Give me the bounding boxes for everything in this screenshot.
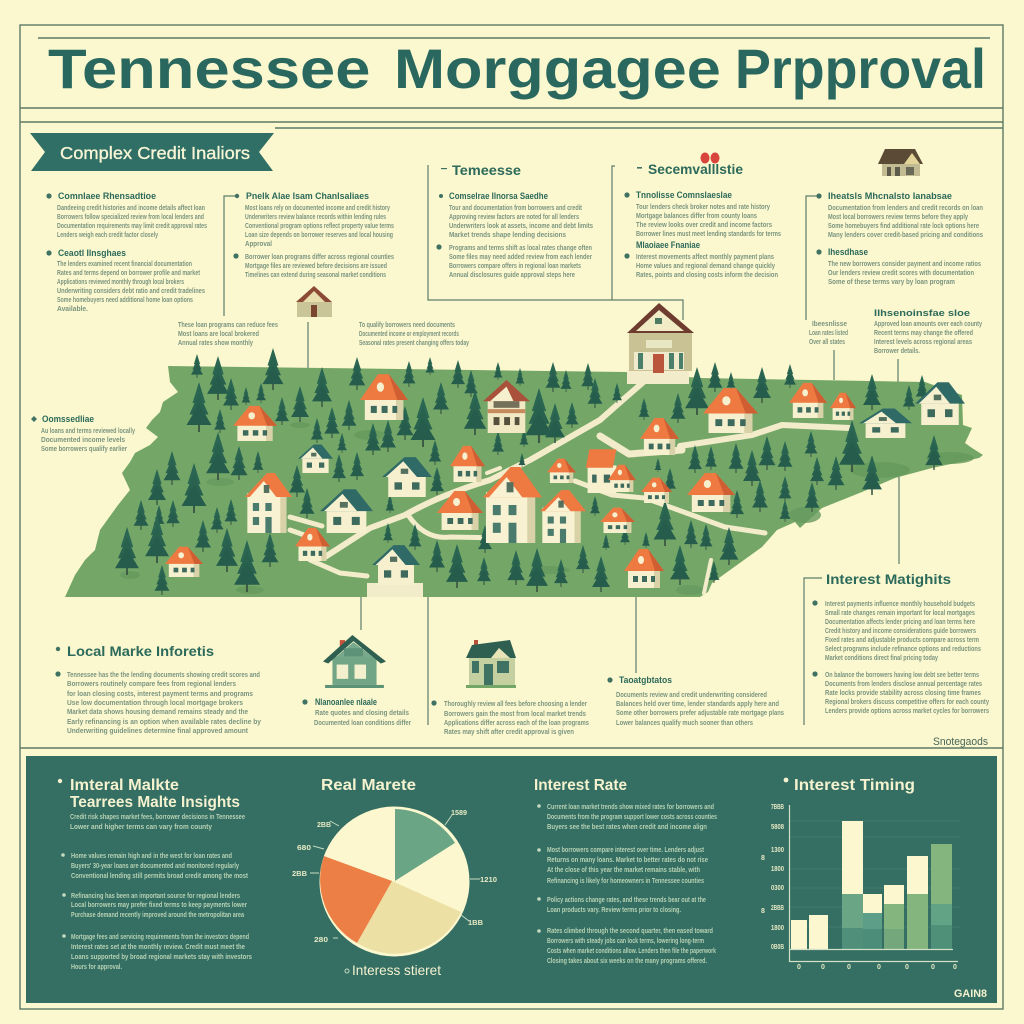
icon: red blobs: [700, 152, 720, 164]
main house: [627, 303, 694, 384]
text block: Market column: Most local borrowers review terms before they apply: [828, 212, 968, 221]
text block: Interest Rate: Documents from the program support lower costs across counties: [547, 812, 717, 821]
text block: Secondary column: [624, 152, 781, 279]
pie chart: [292, 806, 497, 956]
text block: Market column: Documentation from lenders and credit records on loan: [828, 203, 983, 212]
text block: Secondary column: The review looks over credit and income factors: [636, 220, 772, 229]
text block: Local Market Insights: Local Marke Inforetis: [67, 643, 214, 659]
text block: Secondary column: Mlaoiaee Fnaniae: [636, 240, 700, 250]
bar chart: 1800: [771, 866, 784, 873]
text block: Internal Market Insights: Purchase demand recently improved around the metropolitan area: [71, 910, 245, 919]
text block: Secondary column: Mortgage balances differ from county loans: [636, 211, 757, 220]
text block: Lending notes: Borrowers gain the most from local market trends: [444, 709, 586, 718]
panel: connector lines: [224, 165, 899, 725]
bar chart: 8: [761, 908, 765, 915]
text block: Financial Details: Nlanoanlee nlaale: [315, 697, 377, 707]
text block: Complex Financing column: Some homebuyers need additional home loan options: [57, 295, 193, 304]
text block: Local Market Insights: [55, 643, 261, 735]
text block: Interest Insights: Interest Matighits: [826, 571, 951, 587]
text block: Interest Insights: Interest payments influence monthly household budgets: [825, 599, 975, 608]
text block: Oomssedliae: Oomssedliae: [42, 414, 94, 424]
text block: Tennessee column: [436, 162, 593, 279]
text block: Profile column: [233, 191, 394, 279]
text block: Complex Financing column: Underwriting considers debt ratio and credit tradelines: [57, 286, 205, 295]
bar chart: 8: [761, 855, 765, 862]
text block: Complex Financing column: Rates and terms depend on borrower profile and market: [57, 268, 200, 277]
text block: mid callouts above map: Ilhsenoinsfae sloe: [874, 308, 970, 318]
text block: mid callouts above map: Approved loan amounts over each county: [874, 319, 982, 328]
text block: Tennessee column: Comselrae Ilnorsa Saedhe: [449, 191, 548, 201]
bar chart: 7BBB: [771, 804, 784, 811]
text block: mid callouts above map: Interest levels across regional areas: [874, 337, 972, 346]
text block: Complex Financing column: [46, 191, 207, 313]
text block: Interest Rate: Borrowers with steady jobs can lock terms, lowering long-term: [547, 936, 704, 945]
text block: Secondary column: Tour lenders check broker notes and rate history: [636, 202, 770, 211]
text block: Timing: [607, 675, 784, 727]
bar chart: 0300: [771, 885, 784, 892]
text block: Secondary column: Home values and regional demand change quickly: [636, 261, 775, 270]
tree group: [115, 348, 943, 595]
text block: Lending notes: Thoroughly review all fees before choosing a lender: [444, 699, 587, 708]
footnote: Snotegaods: Snotegaods: [933, 736, 988, 748]
icon: green house right: [466, 640, 516, 688]
text block: Secondary column: Borrower lines must meet lending standards for terms: [636, 229, 781, 238]
text block: Internal Market Insights: Home values remain high and in the west for loan rates and: [71, 851, 232, 860]
text block: Secondary column: Tnnolisse Comnslaeslae: [636, 190, 732, 200]
text block: Timing: Some other borrowers prefer adjustable rate mortgage plans: [616, 708, 784, 717]
text block: Secondary column: Interest movements affect monthly payment plans: [636, 252, 774, 261]
text block: Local Market Insights: Market data shows housing demand remains steady and the: [67, 707, 248, 716]
text block: Internal Market Insights: [58, 777, 252, 971]
text block: Market column: Some homebuyers find additional rate lock options here: [828, 221, 979, 230]
text block: Tennessee column: Temeesse: [452, 162, 521, 178]
text block: Timing: Lower balances qualify much sooner than others: [616, 718, 753, 727]
bar chart: 0: [905, 964, 909, 971]
text block: mid callouts above map: Loan rates listed: [809, 328, 848, 337]
state shape: [65, 366, 983, 597]
text block: Complex Financing column: Ceaotl Ilnsghaes: [58, 248, 126, 258]
text block: Interest Insights: Credit history and income considerations guide borrowers: [825, 626, 976, 635]
icon: top right house: [878, 149, 923, 176]
text block: mid callouts above map: Borrower details.: [874, 346, 920, 355]
bar chart: 0: [931, 964, 935, 971]
text block: Profile column: Timelines can extend during seasonal market conditions: [245, 270, 386, 279]
bar chart: 0: [877, 964, 881, 971]
text block: Interest Rate: Rates climbed through the second quarter, then eased toward: [547, 926, 713, 935]
text block: mid callouts above map: Seasonal rates present changing offers today: [359, 338, 469, 347]
heading: Real Marete: Real Marete: [321, 777, 416, 794]
text block: Complex Financing column: Documentation requirements may limit credit approval rates: [57, 221, 207, 230]
text block: Tennessee column: Tour and documentation from borrowers and credit: [449, 203, 582, 212]
text block: mid callouts above map: Over all states: [809, 337, 845, 346]
panel: teal insights: [26, 756, 997, 1003]
pie caption: Interess stieret: [352, 962, 441, 978]
text block: Tennessee column: Underwriters look at assets, income and debt limits: [449, 221, 593, 230]
text block: Market column: The new borrowers consider payment and income ratios: [828, 259, 981, 268]
text block: Secondary column: Secemvalllstie: [648, 161, 743, 177]
text block: Interest Insights: Select programs include refinance options and reductions: [825, 644, 981, 653]
text block: Internal Market Insights: Buyers' 30-year loans are documented and monitored regularly: [71, 861, 240, 870]
text block: Internal Market Insights: Interest rates set at the monthly review. Credit must meet the: [71, 942, 245, 951]
bar chart: 5808: [771, 824, 784, 831]
text block: Tennessee column: Annual disclosures guide approval steps here: [449, 270, 575, 279]
map: Tennessee landscape: [65, 303, 983, 597]
text block: Complex Financing column: Borrowers follow specialized review from local lenders and: [57, 212, 204, 221]
banner: Complex Credit Inaliors: [30, 133, 274, 171]
text block: Complex Financing column: Comnlaee Rhensadtioe: [58, 191, 156, 201]
text block: Timing: Taoatgbtatos: [619, 675, 672, 685]
pie chart: 1BB: [468, 918, 484, 927]
bar chart: 0: [797, 964, 801, 971]
text block: Interest Insights: Small rate changes remain important for local mortgages: [825, 608, 975, 617]
text block: Internal Market Insights: Hours for approval.: [71, 962, 122, 971]
text block: Internal Market Insights: Lower and higher terms can vary from county: [70, 822, 213, 831]
text block: Lending notes: Rates may shift after credit approval is given: [444, 727, 574, 736]
heading: Interest Timing: Interest Timing: [794, 777, 915, 794]
text block: Internal Market Insights: Credit risk shapes market fees, borrower decisions in Tennessee: [70, 812, 245, 821]
text block: Market column: Many lenders cover credit-based pricing and conditions: [828, 230, 983, 239]
text block: Profile column: Mortgage files are reviewed before decisions are issued: [245, 261, 387, 270]
pie chart: 1589: [451, 808, 467, 817]
text block: Interest Rate: Interest Rate: [534, 777, 627, 794]
text block: Profile column: Approval: [245, 239, 272, 248]
text block: Interest Rate: Buyers see the best rates when credit and income align: [547, 822, 707, 831]
text block: Complex Financing column: Lenders weigh each credit factor closely: [57, 230, 158, 239]
text block: Oomssedliae: [31, 414, 135, 453]
text block: Timing: Balances held over time, lender standards apply here and: [616, 699, 779, 708]
text block: Internal Market Insights: Mortgage fees and servicing requirements from the investors depend: [71, 932, 249, 941]
text block: Lending notes: Applications differ across each of the loan programs: [444, 718, 589, 727]
pie chart: 1210: [480, 875, 497, 884]
text block: Interest Rate: Costs when market conditions allow. Lenders then file the paperwork: [547, 946, 717, 955]
bar chart: 0: [847, 964, 851, 971]
bar chart: 1800: [771, 925, 784, 932]
text block: Interest Rate: [534, 777, 717, 965]
roads: [290, 378, 850, 593]
text block: Tennessee column: Borrowers compare offers in regional loan markets: [449, 261, 581, 270]
text block: Internal Market Insights: Local borrowers may prefer fixed terms to keep payments lower: [71, 900, 247, 909]
text block: mid callouts above map: Ibeesnlisse: [812, 319, 847, 328]
text block: Tennessee column: Some files may need added review from each lender: [449, 252, 592, 261]
text block: Financial Details: Rate quotes and closing details: [315, 708, 409, 717]
text block: Interest Rate: Policy actions change rates, and these trends bear out at the: [547, 895, 706, 904]
text block: mid callouts above map: [178, 308, 982, 355]
pie chart: 2BB: [317, 820, 332, 829]
text block: mid callouts above map: These loan programs can reduce fees: [178, 320, 278, 329]
bar chart: 0: [953, 964, 957, 971]
text block: Local Market Insights: Borrowers routinely compare fees from regional lenders: [67, 679, 236, 688]
text block: Internal Market Insights: Conventional lending still permits broad credit among the most: [71, 871, 248, 880]
text block: Oomssedliae: Some borrowers qualify earlier: [41, 444, 127, 453]
bar chart: 0: [821, 964, 825, 971]
text block: Interest Insights: On balance the borrowers having low debt see better terms: [825, 670, 979, 679]
text block: Market column: [816, 191, 983, 286]
text block: Financial Details: [302, 697, 411, 727]
text block: Profile column: Pnelk Alae Isam Chanlsaliaes: [246, 191, 369, 201]
text block: Profile column: Most loans rely on documented income and credit history: [245, 203, 390, 212]
text block: Interest Rate: At the close of this year the market remains stable, with: [547, 865, 700, 874]
text block: mid callouts above map: Annual rates show monthly: [178, 338, 253, 347]
text block: Local Market Insights: Early refinancing is an option when available rates decline by: [67, 717, 261, 726]
text block: Tennessee column: Approving review factors are noted for all lenders: [449, 212, 579, 221]
bar chart: 1300: [771, 847, 784, 854]
text block: Market column: Our lenders review credit scores with documentation: [828, 268, 974, 277]
text block: Profile column: Conventional program options reflect property value terms: [245, 221, 394, 230]
text block: Interest Insights: Documents from lenders disclose annual percentage rates: [825, 679, 982, 688]
text block: Lending notes: [431, 699, 589, 736]
text block: Tennessee column: Market trends shape lending decisions: [449, 230, 566, 239]
text block: Local Market Insights: Use low documentation through local mortgage brokers: [67, 698, 243, 707]
text block: Local Market Insights: Tennessee has the the lending documents showing credit scores and: [67, 670, 260, 679]
text block: Interest Insights: [812, 571, 989, 715]
text block: Profile column: Underwriters review balance records within lending rules: [245, 212, 386, 221]
text block: Profile column: Borrower loan programs differ across regional counties: [245, 252, 394, 261]
text block: Secondary column: Rates, points and closing costs inform the decision: [636, 270, 778, 279]
text block: Complex Financing column: Dandeeing credit histories and income details affect loan: [57, 203, 205, 212]
text block: Market column: Iheatsls Mhcnalsto Ianabsae: [828, 191, 952, 201]
bar chart: 0B0B: [771, 944, 784, 951]
text block: mid callouts above map: Most loans are local brokered: [178, 329, 259, 338]
text block: Complex Financing column: The lenders examined recent financial documentation: [57, 259, 192, 268]
text block: Local Market Insights: for loan closing costs, interest payment terms and programs: [67, 689, 253, 698]
bar chart: 2BBB: [771, 905, 784, 912]
text block: Interest Rate: Refinancing is likely for homeowners in Tennessee counties: [547, 876, 704, 885]
text block: mid callouts above map: To qualify borrowers need documents: [359, 320, 455, 329]
text block: Internal Market Insights: Loans supported by broad regional markets stay with investors: [71, 952, 252, 961]
text block: Interest Insights: Rate locks provide stability across closing time frames: [825, 688, 981, 697]
text block: Internal Market Insights: Imteral Malkte: [70, 777, 179, 794]
title: Prpproval: [735, 37, 986, 100]
text block: Complex Financing column: Available.: [57, 304, 88, 313]
text block: Interest Rate: Returns on many loans. Market to better rates do not rise: [547, 855, 708, 864]
text block: Oomssedliae: Au loans and terms reviewed locally: [41, 426, 135, 435]
text block: Interest Rate: Loan products vary. Review terms prior to closing.: [547, 905, 681, 914]
title: Morggagee: [394, 38, 721, 100]
text block: Complex Financing column: Applications reviewed monthly through local brokers: [57, 277, 184, 286]
text block: mid callouts above map: Documented income or employment records: [359, 329, 459, 338]
text block: Interest Insights: Documentation affects lender pricing and loan terms here: [825, 617, 975, 626]
text block: Internal Market Insights: Refinancing has been an important source for regional lenders: [71, 891, 240, 900]
text block: mid callouts above map: Recent terms may change the offered: [874, 328, 973, 337]
text block: Interest Rate: Most borrowers compare interest over time. Lenders adjust: [547, 845, 704, 854]
text block: Market column: Ihesdhase: [828, 247, 868, 257]
text block: Profile column: Loan size depends on borrower reserves and local housing: [245, 230, 393, 239]
title: [48, 37, 986, 100]
pie chart: 2BB: [292, 869, 308, 878]
title: Tennessee: [48, 37, 370, 100]
banner: Complex Credit Inaliors: Complex Credit Inaliors: [60, 143, 250, 163]
text block: Interest Insights: Fixed rates and adjustable products compare across term: [825, 635, 979, 644]
ground shading: [120, 422, 974, 595]
text block: Tennessee column: Programs and terms shift as local rates change often: [449, 243, 592, 252]
pie chart: 280: [314, 935, 328, 944]
text block: Interest Rate: Current loan market trends show mixed rates for borrowers and: [547, 802, 714, 811]
text block: Market column: Some of these terms vary by loan program: [828, 277, 955, 286]
icon: small house: [296, 286, 332, 317]
text block: Internal Market Insights: Tearrees Malte Insights: [70, 794, 240, 811]
text block: Local Market Insights: Underwriting guidelines determine final approved amount: [67, 726, 249, 735]
house group: [165, 374, 965, 597]
pie chart: 680: [297, 843, 311, 852]
text block: Financial Details: Documented loan conditions differ: [314, 718, 411, 727]
text block: Interest Insights: Market conditions direct final pricing today: [825, 653, 938, 662]
text block: Timing: Documents review and credit underwriting considered: [616, 690, 767, 699]
bar chart: [761, 804, 960, 971]
icon: green house left: [323, 635, 386, 688]
text block: Interest Rate: Closing takes about six weeks on the many programs offered.: [547, 956, 707, 965]
label: GAIN8: GAIN8: [954, 988, 987, 1000]
text block: Oomssedliae: Documented income levels: [41, 435, 125, 444]
